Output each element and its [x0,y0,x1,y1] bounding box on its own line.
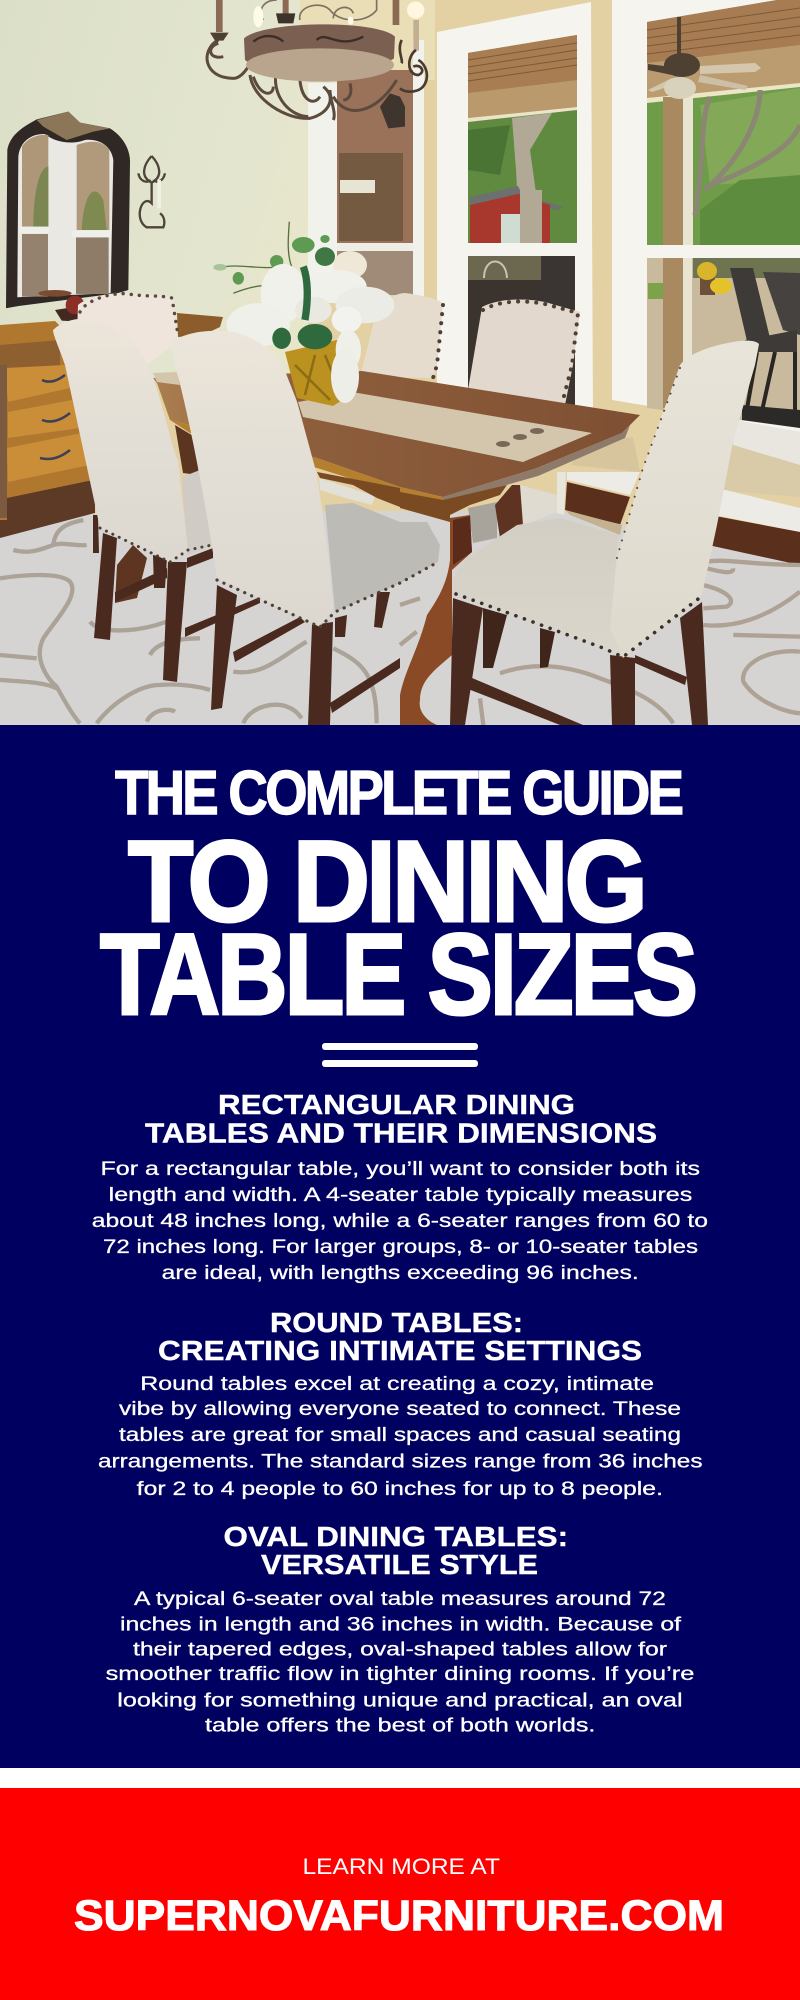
heading: rectangular tables [145,1089,657,1148]
title: TO DINING [128,816,648,946]
text: rectangular tables: are ideal, with lengths exceeding 96 inches. [162,1262,639,1284]
baseboard and floor [0,420,800,565]
back wall [0,0,800,560]
chair seats behind table [319,472,566,543]
back chair left [77,293,178,365]
panel: navy content area [0,725,800,1768]
text: round tables: vibe by allowing everyone seated to connect. These [119,1398,681,1420]
dining chair front middle [170,331,440,725]
dining chair front left [53,319,260,682]
title [100,759,698,1039]
wall fruit bowl [55,296,87,322]
pendant lantern [380,93,405,128]
right window [612,0,800,432]
text: oval tables: their tapered edges, oval-shaped tables allow for [133,1638,668,1660]
text: rectangular tables [92,1158,708,1284]
chandelier [207,0,399,120]
text: learn more: LEARN MORE AT [302,1854,500,1879]
text: rectangular tables: For a rectangular table, you’ll want to consider both its [100,1158,700,1180]
panel: red footer [0,1788,800,2000]
sideboard [0,313,223,520]
middle window [437,2,593,420]
back chair centre [360,293,443,378]
narrow brick window [308,40,424,300]
text: oval tables: looking for something unique and practical, an oval [117,1690,683,1712]
heading: round tables: ROUND TABLES: [270,1307,523,1338]
text: oval tables: A typical 6-seater oval table measures around 72 [134,1588,666,1610]
heading: rectangular tables: TABLES AND THEIR DIMENSIONS [145,1118,657,1148]
flowers lower sprig [331,349,359,403]
wall sconce [138,156,165,227]
text: rectangular tables: length and width. A 4-seater table typically measures [109,1184,693,1206]
text: round tables: arrangements. The standard sizes range from 36 inches [98,1450,703,1472]
heading: oval tables [224,1521,568,1580]
text: round tables [98,1373,703,1500]
rug with swirls [0,510,800,725]
ceiling fan [648,17,761,99]
text: website: SUPERNOVAFURNITURE.COM [74,1892,724,1940]
text: oval tables: inches in length and 36 inches in width. Because of [120,1614,682,1636]
title: TABLE SIZES [100,909,698,1039]
table top [153,371,640,522]
wall mirror [6,112,130,308]
text: oval tables [106,1588,694,1737]
text: oval tables: smoother traffic flow in tighter dining rooms. If you’re [106,1663,694,1685]
title: THE COMPLETE GUIDE [115,759,684,828]
table runner [153,372,592,462]
heading: round tables: CREATING INTIMATE SETTINGS [158,1335,642,1366]
heading: oval tables: OVAL DINING TABLES: [224,1521,568,1552]
text: oval tables: table offers the best of both worlds. [205,1715,595,1737]
right candle [400,1,427,92]
photo: dining room [0,0,800,725]
heading: rectangular tables: RECTANGULAR DINING [218,1089,575,1120]
text: rectangular tables: 72 inches long. For larger groups, 8- or 10-seater tables [103,1236,698,1258]
back chair right [468,299,580,405]
flowers [213,222,394,370]
text: round tables: Round tables excel at creating a cozy, intimate [140,1373,654,1395]
heading: oval tables: VERSATILE STYLE [261,1549,538,1580]
text: round tables: tables are great for small spaces and casual seating [119,1424,681,1446]
dining chair front right [450,341,759,725]
divider bars [322,1043,478,1067]
heading: round tables [158,1307,642,1366]
table pedestal [115,515,472,725]
centerpiece vase [285,340,350,406]
text: round tables: for 2 to 4 people to 60 inches for up to 8 people. [137,1478,663,1500]
text: rectangular tables: about 48 inches long, while a 6-seater ranges from 60 to [92,1210,708,1232]
